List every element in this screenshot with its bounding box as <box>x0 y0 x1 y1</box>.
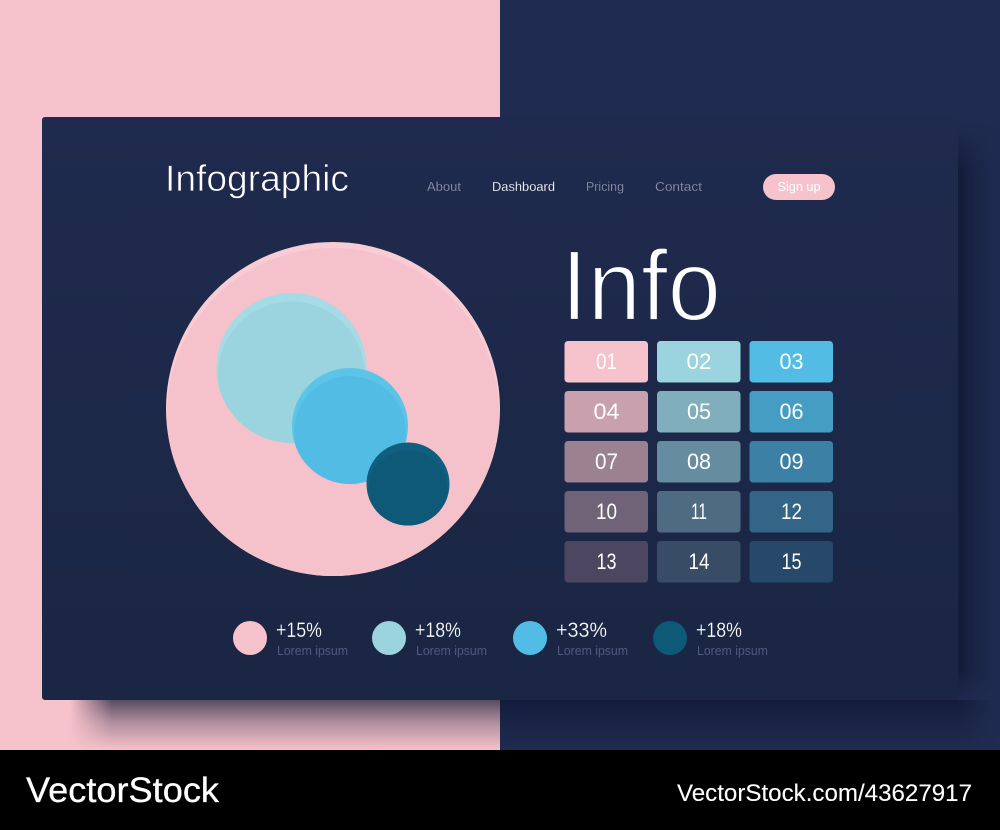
legend <box>233 619 768 658</box>
circle: dark teal <box>366 442 450 530</box>
tile 07: 07 <box>595 449 618 474</box>
tile 13 <box>564 541 648 582</box>
legend item: pink: Lorem ipsum <box>277 643 348 658</box>
circle: blue <box>292 368 408 488</box>
legend item: light teal: +18% <box>415 619 461 642</box>
logo title: Infographic <box>165 158 349 199</box>
tile 04 <box>564 391 648 432</box>
navigation menu: About <box>427 179 461 194</box>
tile 15 <box>750 541 833 582</box>
dashboard card <box>42 117 958 700</box>
sign up button <box>763 174 835 200</box>
legend item: pink <box>233 619 348 658</box>
tile 10: 10 <box>596 499 617 524</box>
circle: light teal <box>216 293 366 448</box>
legend item: light teal: Lorem ipsum <box>416 643 487 658</box>
tile 12: 12 <box>781 499 802 524</box>
tile 02 <box>657 341 740 382</box>
tile 07 <box>564 441 648 482</box>
legend item: dark teal: Lorem ipsum <box>697 643 768 658</box>
tile 13: 13 <box>596 549 616 574</box>
tile 14: 14 <box>688 549 710 574</box>
tile 01 <box>564 341 648 382</box>
tile 08: 08 <box>687 449 711 474</box>
legend item: pink: +15% <box>276 619 322 642</box>
navigation menu: Dashboard <box>492 179 555 194</box>
tile 03: 03 <box>780 349 804 374</box>
legend item: dark teal: +18% <box>696 619 742 642</box>
tile 05: 05 <box>687 399 711 424</box>
tile 01: 01 <box>596 349 617 374</box>
tile 10 <box>564 491 648 532</box>
tile 06 <box>750 391 833 432</box>
sign up button: Sign up <box>778 179 820 194</box>
navigation menu: Pricing <box>586 179 624 194</box>
card shadow <box>70 125 996 750</box>
tile 02: 02 <box>686 349 712 374</box>
navigation menu: Contact <box>655 179 702 194</box>
tile 03 <box>750 341 833 382</box>
tile 09: 09 <box>780 449 804 474</box>
legend item: blue: +33% <box>556 619 607 642</box>
tile 12 <box>750 491 833 532</box>
tile 08 <box>657 441 740 482</box>
legend item: light teal <box>372 619 487 658</box>
numbered tile grid <box>564 341 833 582</box>
tile 11: 11 <box>691 499 707 524</box>
legend item: blue: Lorem ipsum <box>557 643 628 658</box>
tile 09 <box>750 441 833 482</box>
tile 05 <box>657 391 740 432</box>
tile 15: 15 <box>782 549 802 574</box>
footer url: VectorStock.com/43627917 <box>677 780 972 807</box>
footer bar <box>0 750 1000 830</box>
tile 11 <box>657 491 740 532</box>
circle: large pink <box>166 242 500 580</box>
nested circle chart <box>166 242 500 580</box>
tile 14 <box>657 541 740 582</box>
legend item: blue <box>513 619 628 658</box>
navigation menu <box>427 179 702 194</box>
big heading: Info <box>561 230 721 342</box>
tile 04: 04 <box>594 399 620 424</box>
footer brand: VectorStock <box>26 771 220 810</box>
legend item: dark teal <box>653 619 768 658</box>
tile 06: 06 <box>780 399 804 424</box>
